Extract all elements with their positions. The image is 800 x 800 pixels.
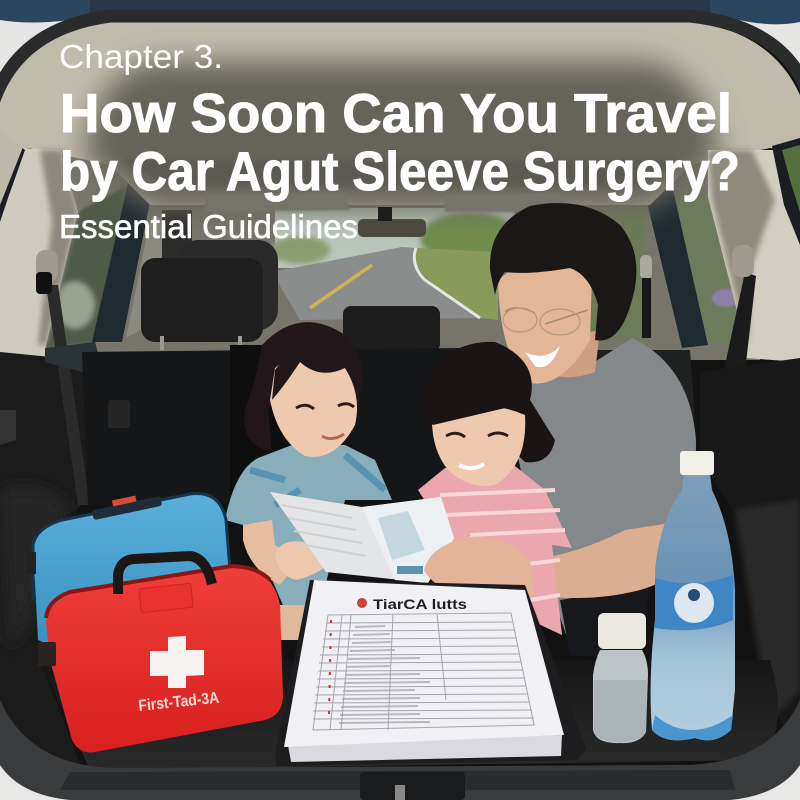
rear window view [270, 208, 645, 340]
checklist title: TiarCA lutts [373, 596, 467, 612]
left pillar [0, 130, 78, 362]
red logo [357, 598, 367, 608]
first aid bag [38, 556, 283, 752]
cargo sill and bumper [0, 700, 800, 800]
bag label: First-Tad-3A [138, 690, 220, 715]
blue pouch [26, 494, 230, 650]
girl left [225, 322, 392, 640]
girl right [418, 342, 572, 635]
left side window [45, 183, 192, 348]
right side window [640, 185, 747, 350]
left girl hair back [244, 322, 363, 452]
man's hand on booklet [424, 537, 535, 599]
man [490, 203, 696, 660]
road [272, 247, 498, 320]
rear seats [0, 240, 695, 505]
left girl face [270, 354, 357, 457]
headline line 1: How Soon Can You Travel [60, 82, 732, 144]
checklist clipboard [275, 580, 586, 766]
small water bottle [593, 613, 648, 743]
man torso [500, 338, 696, 640]
man hair [490, 203, 636, 340]
right girl shirt [418, 462, 572, 635]
booklet [270, 492, 535, 599]
left girl shirt [225, 445, 392, 610]
bag handle [118, 556, 212, 594]
floor [40, 660, 778, 770]
man face [498, 262, 592, 384]
checklist page [284, 580, 564, 747]
left girl arm [243, 520, 300, 585]
chapter label: Chapter 3. [59, 38, 223, 75]
right pillar [708, 138, 800, 450]
trunk side walls [0, 250, 800, 790]
left girl hand [275, 541, 330, 580]
headline line 2: by Car Agut Sleeve Surgery? [60, 140, 740, 202]
subtitle: Essential Guidelines [59, 208, 358, 245]
bottle label [655, 575, 733, 630]
title block [59, 38, 740, 245]
door seal [0, 16, 800, 100]
ceiling and headliner [0, 20, 800, 237]
cabin interior base [40, 145, 760, 360]
man forearm [530, 520, 690, 598]
white cross [150, 636, 204, 688]
bag body [46, 567, 283, 752]
checklist table [313, 613, 534, 730]
man neck [520, 330, 600, 377]
man lower body [560, 585, 650, 660]
right girl hair back [422, 342, 555, 462]
left girl leg [278, 605, 308, 640]
large water bottle [651, 451, 735, 740]
right girl face [432, 406, 525, 486]
